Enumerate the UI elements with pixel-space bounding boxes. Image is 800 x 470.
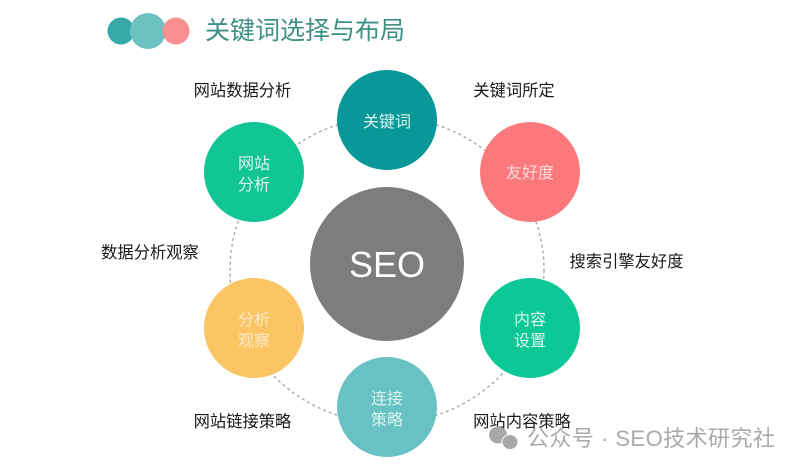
label: 网站链接策略: 网站链接策略	[194, 413, 292, 431]
node: 分析观察: 分析	[238, 311, 270, 329]
node: 网站分析: 网站	[238, 155, 270, 173]
label: 关键词所定: 关键词所定	[473, 82, 555, 100]
node: 分析观察: 观察	[238, 332, 270, 350]
node: 友好度	[480, 122, 580, 222]
node: 网站分析: 分析	[238, 176, 270, 194]
label: 搜索引擎友好度: 搜索引擎友好度	[570, 253, 683, 271]
node: 连接策略: 连接	[371, 390, 403, 408]
dashed connecting ring	[230, 117, 544, 423]
node: 连接策略: 策略	[371, 411, 403, 429]
label: 网站数据分析: 网站数据分析	[194, 82, 291, 100]
node: 内容设置	[480, 278, 580, 378]
node: 网站分析	[204, 122, 304, 222]
node: 内容设置: 设置	[514, 332, 546, 350]
watermark icon: chat bubbles	[489, 426, 518, 450]
watermark text: 公众号 · SEO技术研究社	[527, 426, 775, 451]
center circle: SEO: SEO	[349, 244, 425, 285]
node: 关键词: 关键词	[363, 113, 411, 131]
node: 内容设置: 内容	[514, 311, 546, 329]
node: 连接策略	[337, 357, 437, 457]
label: 数据分析观察: 数据分析观察	[101, 244, 199, 262]
node: 分析观察	[204, 278, 304, 378]
label: 网站内容策略: 网站内容策略	[473, 413, 572, 431]
node: 友好度: 友好度	[506, 164, 554, 182]
node: 关键词	[337, 70, 437, 170]
center circle: SEO	[310, 187, 464, 341]
title: 关键词选择与布局	[205, 17, 405, 45]
header icon: three overlapping circles	[108, 13, 190, 49]
